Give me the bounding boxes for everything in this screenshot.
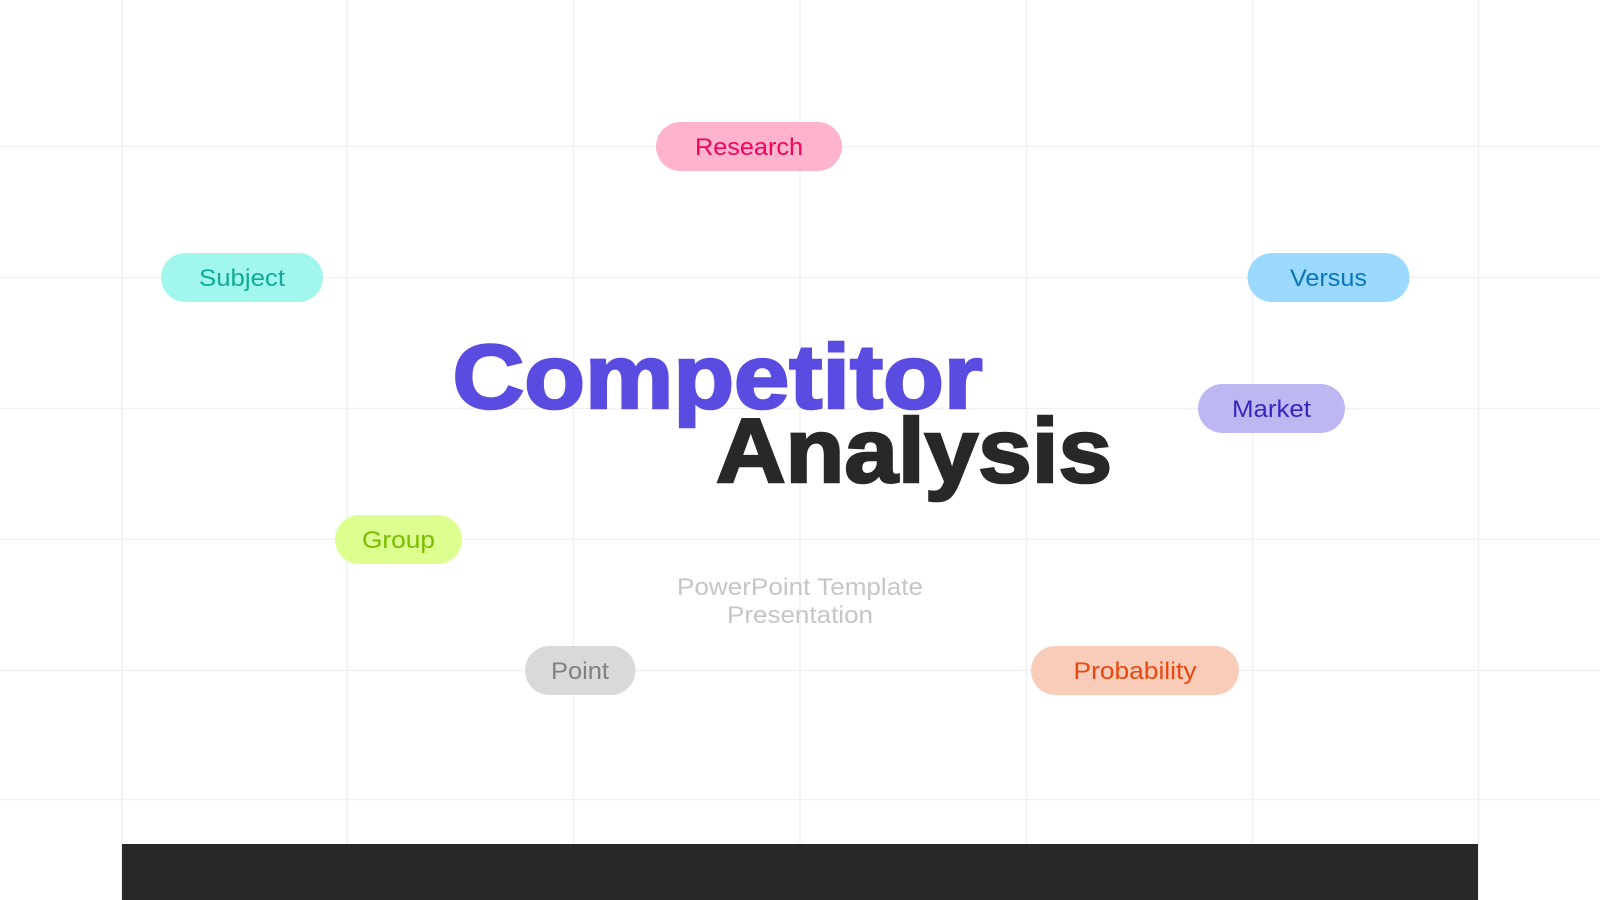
- pill: Probability: [1031, 646, 1239, 695]
- pill: Market: Market: [1232, 396, 1311, 423]
- pill: Market: [1198, 384, 1345, 433]
- footer bar: [122, 844, 1478, 900]
- title line: Competitor: Competitor: [452, 327, 982, 428]
- title line: Analysis: Analysis: [716, 401, 1112, 502]
- pill: Probability: Probability: [1074, 658, 1196, 685]
- pill: Point: Point: [551, 658, 609, 685]
- pill: Versus: Versus: [1290, 265, 1367, 292]
- pill: Versus: [1248, 253, 1410, 302]
- pill: Research: [656, 122, 842, 171]
- pill: Group: [335, 515, 462, 564]
- pill: Research: Research: [695, 134, 803, 161]
- subtitle line 1: PowerPoint Template: [677, 574, 923, 601]
- pill: Subject: Subject: [199, 265, 285, 292]
- pill: Point: [525, 646, 636, 695]
- pill: Subject: [161, 253, 323, 302]
- subtitle: [677, 574, 923, 629]
- pill: Group: Group: [362, 527, 435, 554]
- subtitle line 2: Presentation: [727, 602, 873, 629]
